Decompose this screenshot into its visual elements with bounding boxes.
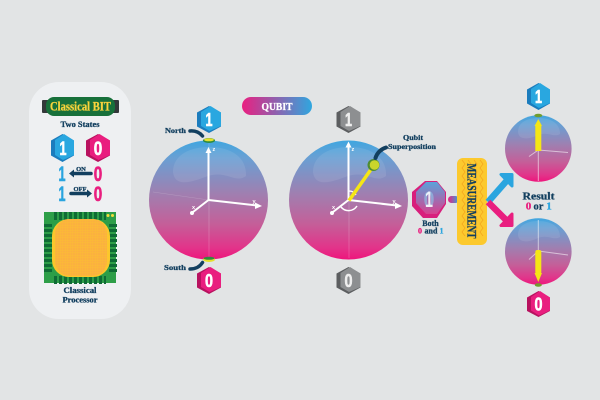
icon: hexagon 0 bbox=[86, 134, 110, 162]
label: Both 0 and 1: 0 bbox=[418, 226, 422, 236]
label: Classical Processor: Classical bbox=[64, 286, 97, 295]
panel: measurement bbox=[457, 158, 487, 245]
label: Both 0 and 1: and bbox=[425, 226, 438, 236]
label: Result 0 or 1: or bbox=[534, 202, 544, 212]
label: Result 0 or 1 bbox=[522, 192, 555, 212]
on row bbox=[58, 163, 102, 186]
vector up bbox=[534, 119, 542, 151]
icon: hexagon 1 bbox=[51, 134, 74, 162]
axes bbox=[190, 147, 262, 215]
icon: hexagon 1 result bbox=[527, 83, 550, 110]
sphere: result 0 bbox=[505, 218, 572, 287]
icon: hexagon 1 result: 1 bbox=[535, 87, 542, 107]
on row: ON bbox=[76, 166, 86, 173]
title: Classical BIT: Classical BIT bbox=[50, 100, 112, 114]
label: Qubit Superposition bbox=[376, 133, 437, 158]
sphere: superposition bbox=[289, 140, 408, 260]
label: Qubit Superposition: Superposition bbox=[388, 142, 437, 151]
marker: south pole bbox=[203, 257, 215, 262]
heading: QUBIT pill: QUBIT bbox=[262, 102, 292, 113]
arrow: to result 0 bbox=[488, 202, 512, 226]
label: North: North bbox=[165, 126, 187, 135]
connector bbox=[448, 196, 459, 203]
icon: classical processor chip bbox=[44, 212, 116, 283]
heading: Two States: Two States bbox=[60, 119, 100, 129]
heading: QUBIT pill bbox=[242, 97, 312, 115]
label: Result 0 or 1: 0 bbox=[526, 200, 532, 212]
sphere: result 1 bbox=[505, 114, 572, 182]
axes: y bbox=[392, 199, 396, 205]
icon: hexagon 0 result bbox=[527, 291, 550, 317]
label: North bbox=[165, 126, 202, 136]
label: Both 0 and 1: 1 bbox=[440, 226, 444, 236]
off row: 1 bbox=[58, 183, 66, 206]
icon: gray hexagon 1 bbox=[336, 106, 360, 133]
icon: hexagon 1: 1 bbox=[60, 139, 67, 160]
axes: z bbox=[212, 147, 216, 153]
icon: hexagon 1 north bbox=[197, 106, 221, 133]
axes: z bbox=[352, 147, 354, 153]
off row bbox=[58, 183, 102, 206]
label: Classical Processor: Processor bbox=[62, 296, 98, 304]
icon: both hexagon bbox=[412, 181, 446, 218]
title: Classical BIT bbox=[42, 97, 119, 116]
label: Result 0 or 1: Result bbox=[522, 192, 555, 202]
icon: hexagon 0 south: 0 bbox=[205, 271, 213, 291]
icon: both hexagon: 1 bbox=[425, 187, 433, 212]
icon: gray hexagon 0 bbox=[336, 267, 360, 294]
off row: OFF bbox=[74, 186, 87, 193]
panel: classical bit bbox=[29, 82, 131, 319]
icon: gray hexagon 0: 0 bbox=[344, 271, 352, 291]
label: Both 0 and 1 bbox=[418, 219, 444, 236]
axes: x bbox=[192, 205, 196, 211]
vector down bbox=[534, 250, 542, 282]
label: MEASUREMENT: MEASUREMENT bbox=[464, 164, 480, 239]
icon: hexagon 0 result: 0 bbox=[534, 294, 542, 314]
qubit state vector bbox=[349, 159, 380, 200]
on row: 0 bbox=[94, 163, 102, 186]
marker bbox=[534, 114, 542, 117]
label: South bbox=[164, 262, 202, 272]
label: Result 0 or 1: 1 bbox=[546, 200, 552, 212]
icon: hexagon 1 north: 1 bbox=[206, 110, 212, 130]
label: Qubit Superposition: Qubit bbox=[403, 133, 424, 142]
off row: 0 bbox=[94, 183, 102, 206]
axes bbox=[330, 142, 402, 215]
on row: 1 bbox=[58, 163, 66, 186]
axes: x bbox=[332, 205, 336, 211]
axes: y bbox=[252, 199, 256, 205]
label: Both 0 and 1: Both bbox=[422, 219, 439, 228]
icon: gray hexagon 1: 1 bbox=[345, 110, 352, 130]
label: South: South bbox=[164, 263, 187, 272]
label: Classical Processor bbox=[62, 286, 98, 304]
icon: hexagon 0 south bbox=[197, 267, 221, 294]
arrow: to result 1 bbox=[488, 174, 512, 202]
icon: hexagon 0: 0 bbox=[94, 139, 102, 160]
icon: both hexagon: 0 bbox=[424, 187, 434, 212]
sphere: north south basis bbox=[149, 140, 268, 260]
marker: north pole bbox=[203, 138, 215, 143]
marker bbox=[535, 283, 542, 287]
